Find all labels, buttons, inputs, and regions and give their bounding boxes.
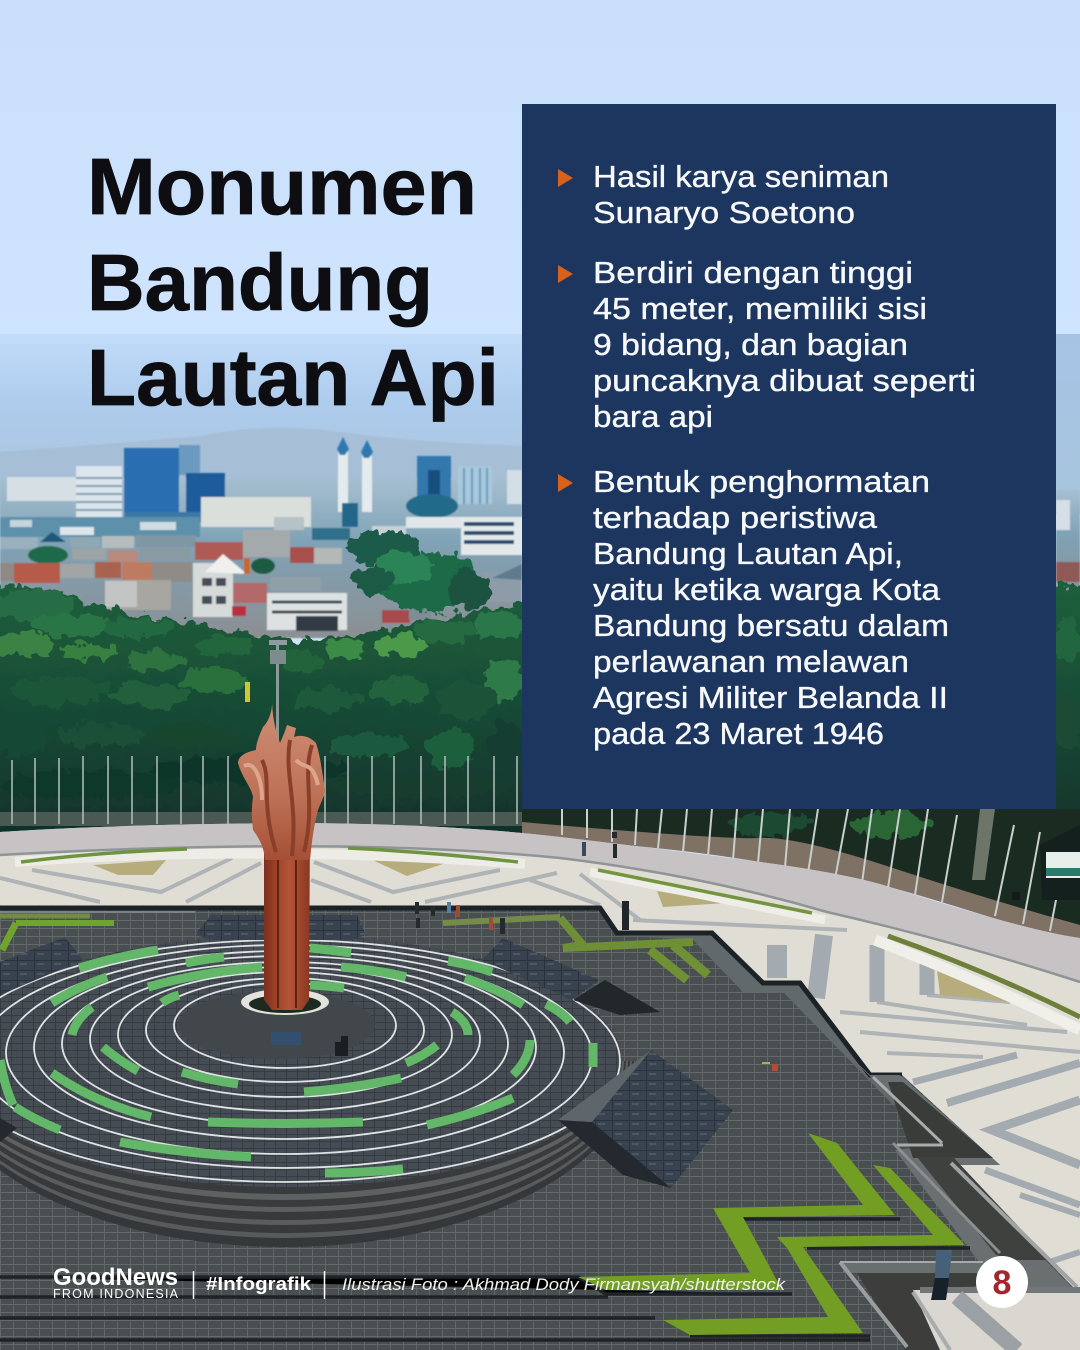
bullet: third item — [558, 464, 949, 751]
title: Lautan Api — [87, 333, 499, 422]
photo: concentric circular plaza with steps — [0, 938, 636, 1247]
bullet: third item: Bentuk penghormatan — [593, 464, 930, 499]
bullet: first item — [558, 159, 889, 230]
bullet: third item: terhadap peristiwa — [593, 500, 878, 535]
photo: flag poles left — [0, 756, 522, 826]
footer: photo credit: Ilustrasi Foto : Akhmad Dody Firmansyah/shutterstock — [342, 1275, 787, 1294]
bullet: second item: puncaknya dibuat seperti — [593, 363, 976, 398]
footer: hashtag: #Infografik — [206, 1274, 312, 1294]
photo: plaza paving — [0, 823, 1080, 1350]
title — [87, 142, 499, 422]
monument: light pole — [269, 640, 287, 755]
bullet: second item: 9 bidang, dan bagian — [593, 327, 908, 362]
bullet: second item: bara api — [593, 399, 713, 434]
photo: yellow flag — [245, 682, 250, 702]
photo: moss strips — [0, 916, 965, 1335]
photo: visitors — [415, 832, 1020, 1071]
bullet: second item — [558, 255, 976, 434]
photo: slate wedges — [0, 915, 733, 1188]
info panel — [522, 104, 1056, 809]
photo: lamp post on plaza — [622, 901, 629, 930]
background: light sky band — [0, 0, 1080, 334]
raised centre cone — [179, 989, 375, 1059]
page number badge: 8 — [993, 1264, 1011, 1302]
green ring segments — [0, 948, 593, 1173]
bullet: third item: Agresi Militer Belanda II — [593, 680, 948, 715]
bullet: third item: yaitu ketika warga Kota — [593, 572, 941, 607]
monument: copper flame tower — [238, 698, 325, 1010]
bullet: second item: 45 meter, memiliki sisi — [593, 291, 927, 326]
bullet: first item: Sunaryo Soetono — [593, 195, 855, 230]
photo: forest — [0, 530, 1080, 845]
bullet: third item: Bandung Lautan Api, — [593, 536, 903, 571]
photo: city skyline — [0, 437, 1080, 638]
photo: lamp post lower right — [931, 1250, 952, 1300]
title: Monumen — [87, 142, 477, 231]
footer: GoodNews logo: FROM INDONESIA — [53, 1287, 179, 1301]
title: Bandung — [87, 238, 433, 327]
bullet: second item: Berdiri dengan tinggi — [593, 255, 913, 290]
photo: forest beyond plaza, right — [522, 809, 1080, 945]
page number badge — [976, 1256, 1028, 1308]
photo: sky and hills — [0, 334, 1080, 514]
bullet: first item: Hasil karya seniman — [593, 159, 889, 194]
photo: dark stone terrace — [0, 908, 1080, 1350]
photo: forest underlay — [0, 650, 522, 830]
bullet: third item: Bandung bersatu dalam — [593, 608, 949, 643]
bullet: third item: pada 23 Maret 1946 — [593, 716, 884, 751]
footer: dividers — [194, 1271, 324, 1299]
bullet: third item: perlawanan melawan — [593, 644, 909, 679]
footer: GoodNews logo: GoodNews — [53, 1264, 178, 1291]
